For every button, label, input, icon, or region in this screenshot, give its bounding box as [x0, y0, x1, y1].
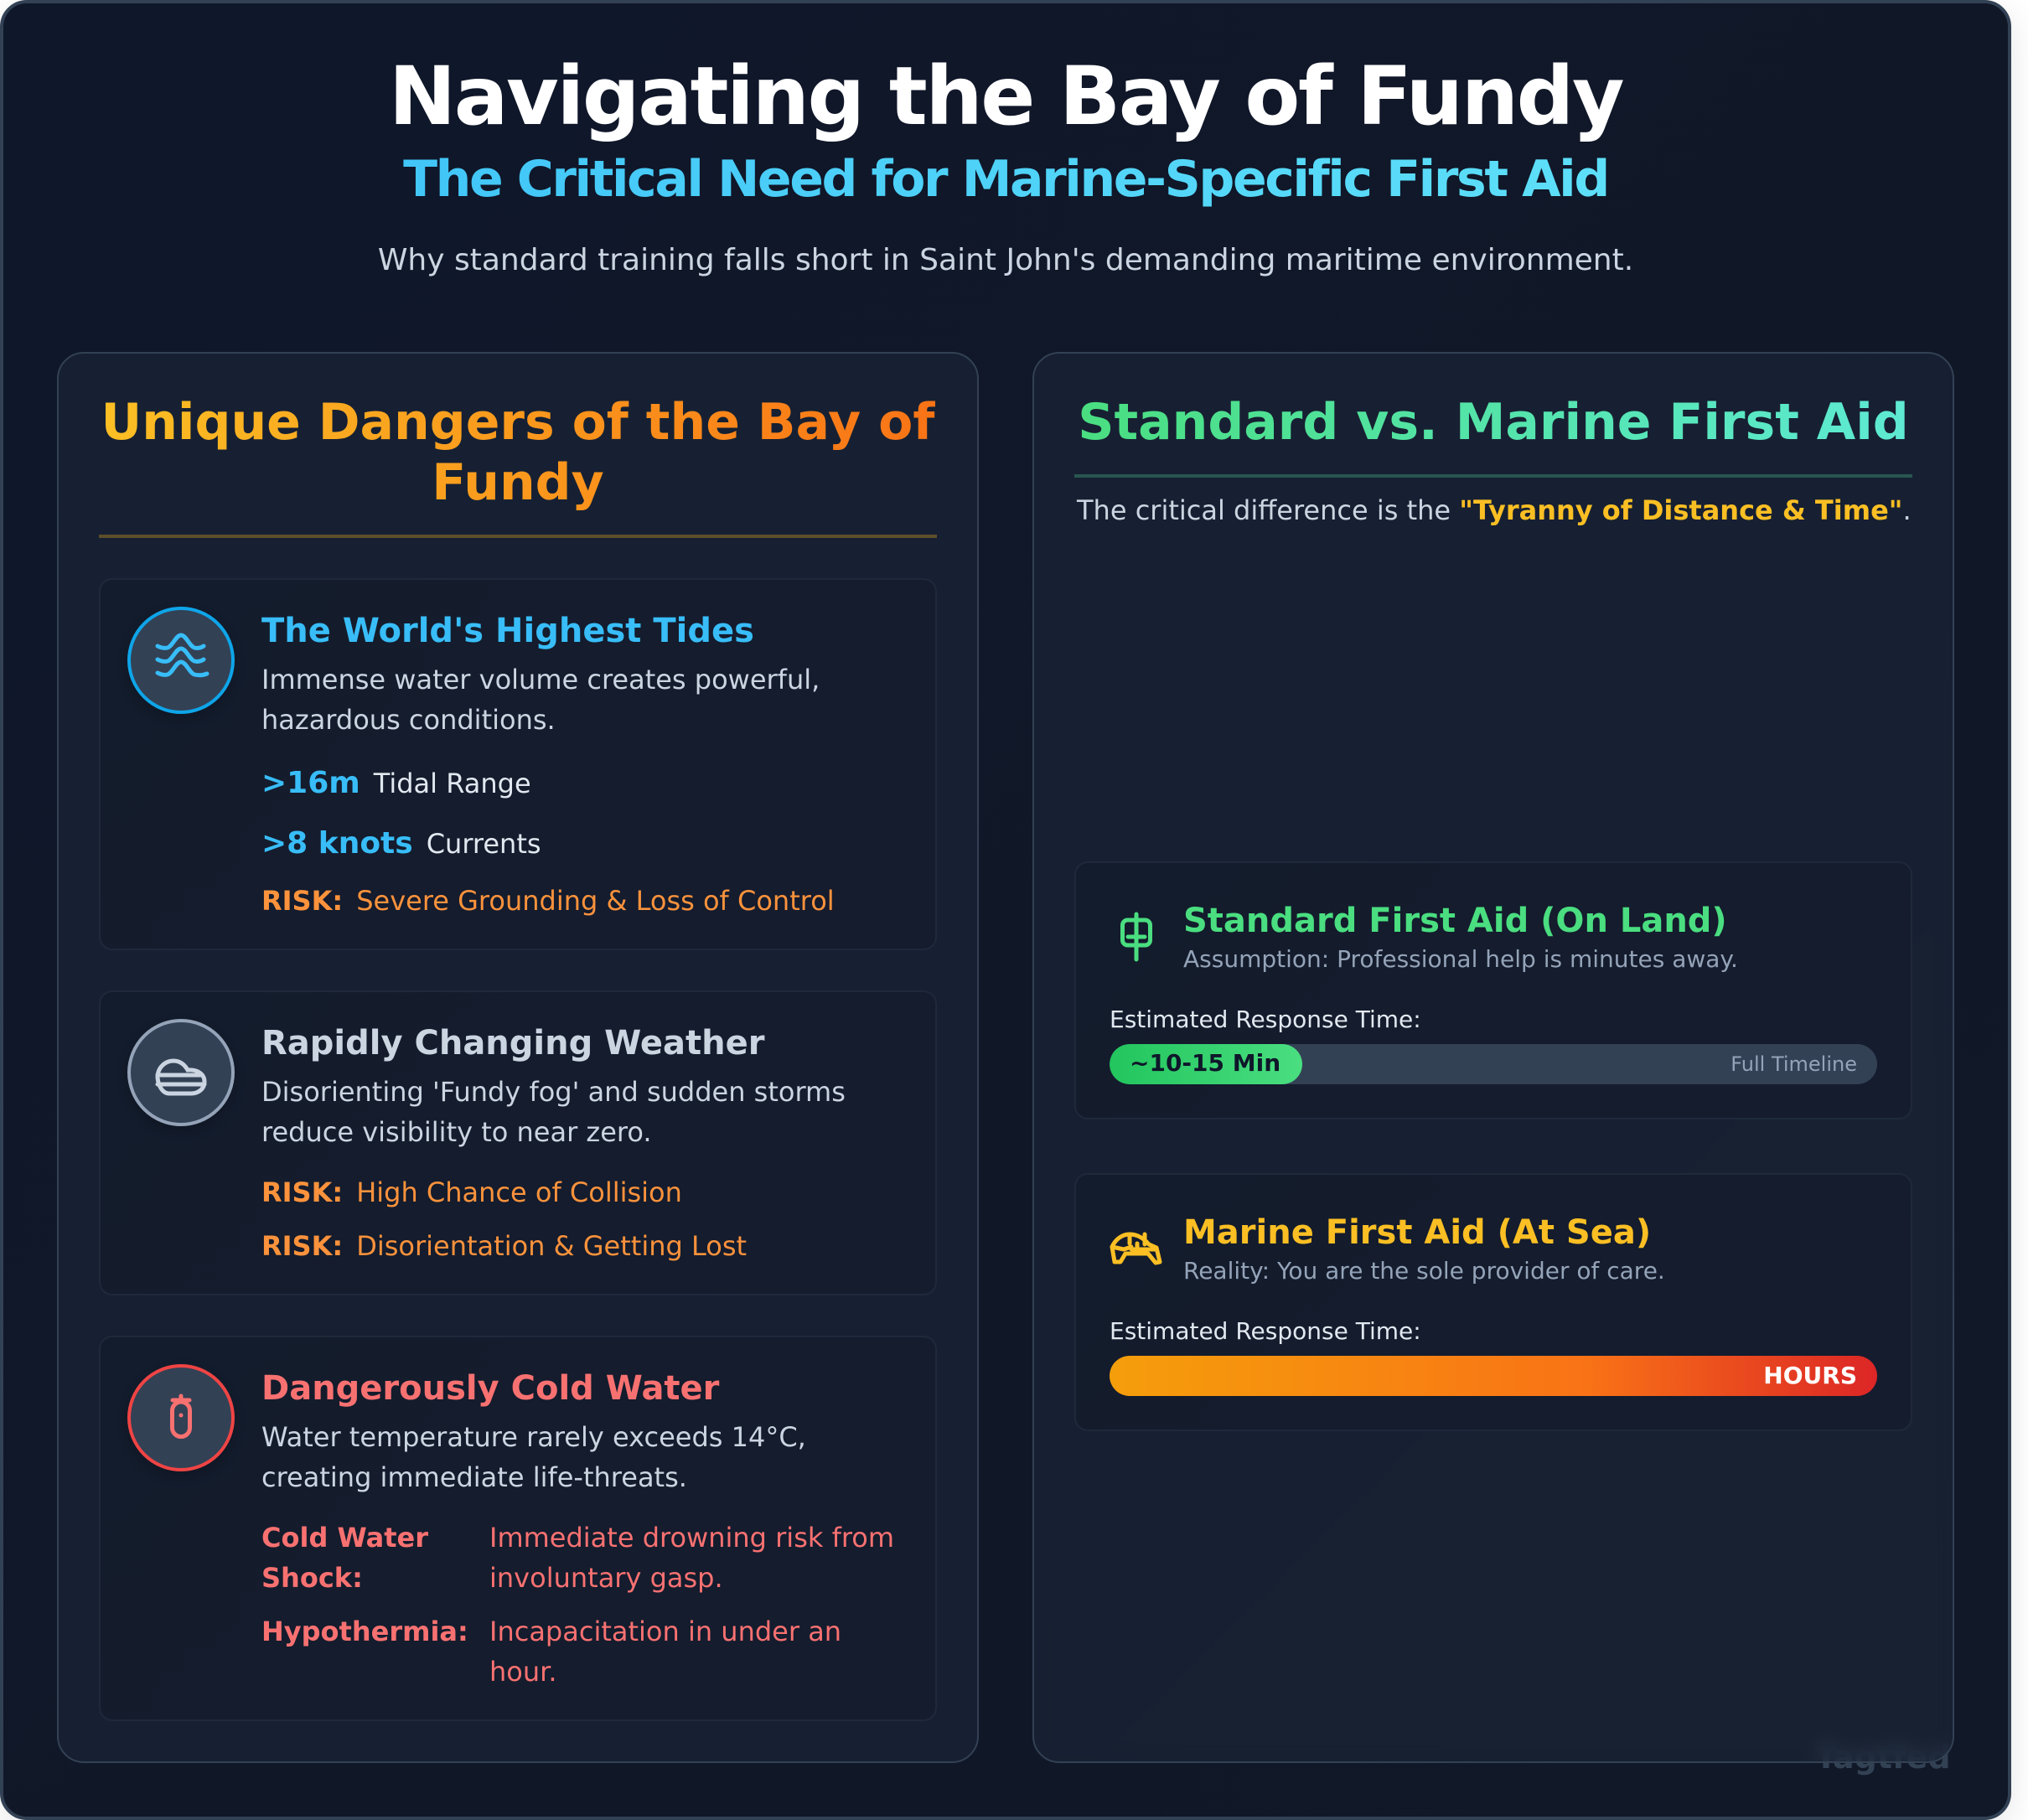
description: hazardous conditions. — [261, 704, 556, 736]
card: highest tides — [99, 578, 937, 950]
card: weather — [99, 990, 937, 1295]
label: Estimated Response Time: — [1110, 1006, 1421, 1033]
definition: cold water shock: Immediate drowning risk from — [489, 1522, 894, 1554]
heading: standard vs marine: Standard vs. Marine First Aid — [1078, 393, 1909, 452]
definition: hypothermia: hour. — [489, 1656, 557, 1688]
description — [261, 1421, 806, 1493]
description — [261, 1076, 846, 1148]
tagline: Why standard training falls short in Saint John's demanding maritime environment. — [378, 243, 1633, 277]
bar caption: HOURS — [1763, 1362, 1857, 1389]
description: Immense water volume creates powerful, — [261, 664, 820, 695]
term: cold water shock: Shock: — [261, 1562, 363, 1594]
divider — [99, 535, 937, 538]
card title: Dangerously Cold Water — [261, 1369, 719, 1408]
description: Water temperature rarely exceeds 14°C, — [261, 1421, 806, 1453]
icon: thermometer — [127, 1364, 235, 1471]
panel: unique dangers — [57, 352, 979, 1763]
bar caption: Full Timeline — [1731, 1052, 1857, 1076]
card title: Standard First Aid (On Land) — [1183, 902, 1727, 940]
response bar: hours — [1110, 1356, 1877, 1396]
intro text: The critical difference is the "Tyranny of Distance & Time". — [1077, 494, 1912, 526]
icon: land medical — [1120, 912, 1152, 962]
card title: The World's Highest Tides — [261, 612, 754, 650]
card: cold water — [99, 1336, 937, 1721]
stat: currents: >8 knots Currents — [261, 826, 541, 861]
bar fill: ~10-15 Min — [1130, 1049, 1280, 1077]
definition: cold water shock: involuntary gasp. — [489, 1562, 723, 1594]
description: Disorienting 'Fundy fog' and sudden storms — [261, 1076, 846, 1108]
subtitle — [3, 147, 2008, 211]
definition: cold water shock — [489, 1522, 894, 1594]
card: standard first aid — [1074, 861, 1912, 1119]
risk: collision: RISK: High Chance of Collision — [261, 1176, 682, 1208]
definition: hypothermia — [489, 1616, 841, 1688]
description — [261, 664, 820, 736]
card: marine first aid — [1074, 1173, 1912, 1431]
subtitle: The Critical Need for Marine-Specific First Aid — [403, 150, 1608, 209]
label: Estimated Response Time: — [1110, 1317, 1421, 1345]
response bar: minutes — [1110, 1044, 1877, 1084]
bar fill — [1110, 1044, 1302, 1084]
term: cold water shock — [261, 1522, 428, 1594]
definition: hypothermia: Incapacitation in under an — [489, 1616, 841, 1647]
description: reduce visibility to near zero. — [261, 1116, 652, 1148]
card title: Rapidly Changing Weather — [261, 1024, 764, 1063]
term: hypothermia: Hypothermia: — [261, 1616, 468, 1647]
card title: Marine First Aid (At Sea) — [1183, 1213, 1651, 1252]
icon: fog cloud — [127, 1019, 235, 1126]
panel: standard vs marine — [1032, 352, 1954, 1763]
term: cold water shock: Cold Water — [261, 1522, 428, 1554]
title: Navigating the Bay of Fundy — [389, 49, 1622, 143]
heading: unique dangers: Unique Dangers of the Bay of Fundy — [101, 393, 934, 512]
stat: tidal range: >16m Tidal Range — [261, 766, 531, 800]
assumption: Assumption: Professional help is minutes away. — [1183, 945, 1738, 973]
icon: boat — [1110, 1232, 1161, 1265]
icon: waves — [127, 607, 235, 714]
reality: Reality: You are the sole provider of care. — [1183, 1257, 1665, 1285]
description: creating immediate life-threats. — [261, 1461, 687, 1493]
risk: RISK: Severe Grounding & Loss of Control — [261, 885, 835, 917]
watermark: Tagtfed — [1815, 1739, 1951, 1776]
risk: disorientation: RISK: Disorientation & Getting Lost — [261, 1230, 747, 1262]
divider — [1074, 474, 1912, 478]
